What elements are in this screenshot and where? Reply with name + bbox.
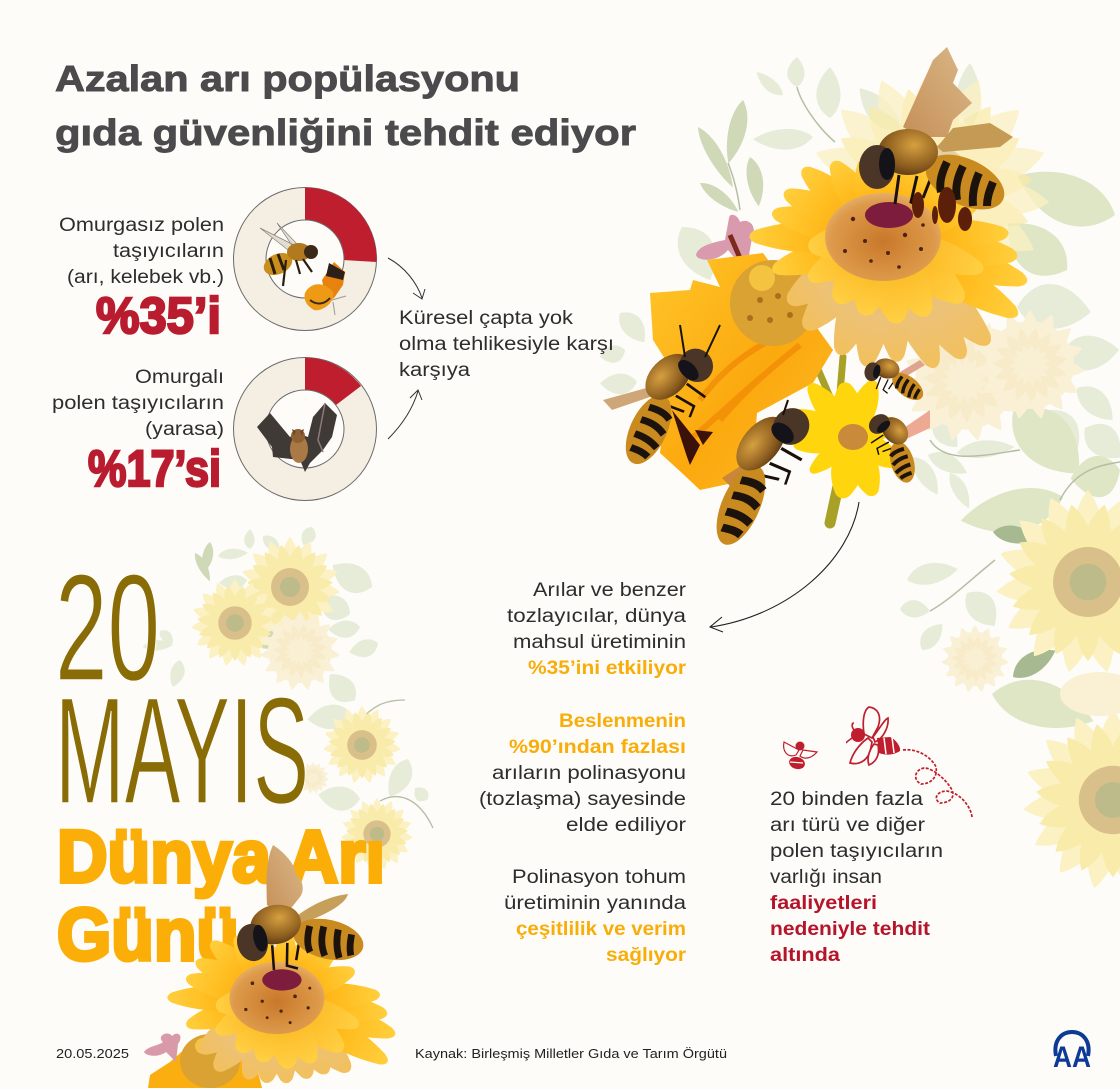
arrow: top donut to text bbox=[388, 258, 425, 299]
arrow: flower to text bbox=[710, 502, 859, 632]
small yellow flower bbox=[783, 376, 907, 501]
text: threatened species: polen taşıyıcıların bbox=[770, 841, 943, 862]
heading: 20 Mayıs: 20 bbox=[55, 543, 160, 713]
wings bbox=[267, 845, 303, 917]
text: pollination: sağlıyor bbox=[606, 945, 687, 966]
text: threatened species: faaliyetleri bbox=[770, 893, 877, 914]
title bbox=[55, 58, 636, 153]
text: global extinction threat: olma tehlikesiyle karşı bbox=[399, 334, 614, 355]
text: crop production: tozlayıcılar, dünya bbox=[507, 606, 686, 627]
title: gıda güvenliğini tehdit ediyor bbox=[55, 112, 636, 153]
logo: AA: AA bbox=[1053, 1041, 1091, 1074]
text: threatened species: altında bbox=[770, 945, 840, 966]
text: crop production: Arılar ve benzer bbox=[533, 580, 687, 601]
text: nutrition: (tozlaşma) sayesinde bbox=[479, 789, 686, 810]
figure: %35: %35’i bbox=[96, 287, 221, 344]
heading: Dünya Arı Günü: Dünya Arı bbox=[57, 815, 385, 898]
label: vertebrate pollinators bbox=[52, 367, 224, 440]
label: invertebrate pollinators bbox=[59, 215, 224, 288]
text: crop production: mahsul üretiminin bbox=[513, 632, 686, 653]
icon: red bees with dotted trail bbox=[784, 707, 972, 818]
icon: big bee bbox=[847, 707, 900, 765]
left bee bbox=[589, 325, 737, 481]
yellow flower bbox=[167, 929, 399, 1085]
date: 20.05.2025 bbox=[56, 1046, 129, 1061]
orange flower bbox=[650, 253, 833, 490]
orange flower, partly visible bbox=[148, 1034, 262, 1088]
heading: Dünya Arı Günü: Günü bbox=[57, 893, 239, 976]
donut chart: invertebrate pollinators bbox=[234, 187, 377, 330]
text: pollination: üretiminin yanında bbox=[504, 893, 686, 914]
icon: bee bbox=[260, 223, 318, 286]
stems bbox=[817, 357, 843, 523]
label: vertebrate pollinators: (yarasa) bbox=[145, 419, 224, 440]
text: pollination bbox=[504, 867, 687, 966]
icon: bat bbox=[257, 403, 337, 472]
main bee bbox=[859, 129, 1013, 231]
bee on yellow flower bbox=[853, 405, 938, 493]
title: Azalan arı popülasyonu bbox=[55, 58, 520, 99]
label: invertebrate pollinators: Omurgasız polen bbox=[59, 215, 224, 236]
text: crop production: %35’ini etkiliyor bbox=[528, 658, 687, 679]
text: pollination: çeşitlilik ve verim bbox=[516, 919, 686, 940]
text: threatened species: varlığı insan bbox=[770, 867, 882, 888]
text: nutrition: Beslenmenin bbox=[559, 711, 686, 732]
text: global extinction threat bbox=[399, 308, 614, 381]
label: invertebrate pollinators: taşıyıcıların bbox=[113, 241, 224, 262]
text: nutrition bbox=[479, 711, 687, 836]
text: threatened species: arı türü ve diğer bbox=[770, 815, 926, 836]
text: nutrition: arıların polinasyonu bbox=[492, 763, 686, 784]
text: global extinction threat: karşıya bbox=[399, 360, 470, 381]
text: pollination: Polinasyon tohum bbox=[512, 867, 686, 888]
donut chart: vertebrate pollinators bbox=[234, 358, 376, 500]
main bee wings bbox=[903, 47, 972, 137]
lower bee bbox=[676, 392, 836, 563]
yellow flower bbox=[749, 153, 1032, 375]
text: threatened species bbox=[770, 789, 943, 966]
heading: Dünya Arı Günü bbox=[57, 815, 385, 976]
text: nutrition: %90’ından fazlası bbox=[509, 737, 686, 758]
pale flowers lower left bbox=[143, 524, 433, 871]
dotted trail bbox=[903, 750, 972, 818]
text: threatened species: 20 binden fazla bbox=[770, 789, 924, 810]
arrow: bottom donut to text bbox=[388, 390, 422, 439]
label: invertebrate pollinators: (arı, kelebek vb.) bbox=[67, 267, 224, 288]
text: nutrition: elde ediliyor bbox=[566, 815, 687, 836]
figure: %17: %17’si bbox=[88, 440, 221, 497]
source: Kaynak: Birleşmiş Milletler Gıda ve Tarım Örgütü bbox=[415, 1046, 727, 1061]
bee bbox=[231, 887, 375, 990]
pale leaves and flowers right bbox=[598, 57, 1120, 893]
icon: small bee bbox=[784, 742, 817, 771]
text: global extinction threat: Küresel çapta yok bbox=[399, 308, 574, 329]
illustration: sunflower and bee, lower left bbox=[144, 845, 399, 1088]
text: crop production bbox=[507, 580, 687, 679]
pink bud bbox=[696, 215, 754, 272]
label: vertebrate pollinators: Omurgalı bbox=[135, 367, 224, 388]
icon: butterfly bbox=[304, 262, 346, 315]
heading: 20 Mayıs bbox=[55, 543, 309, 836]
label: vertebrate pollinators: polen taşıyıcıların bbox=[52, 393, 224, 414]
heading: 20 Mayıs: MAYIS bbox=[55, 666, 309, 836]
pink bud bbox=[144, 1034, 180, 1062]
illustration: flower and bee cluster, upper right bbox=[589, 47, 1032, 563]
text: threatened species: nedeniyle tehdit bbox=[770, 919, 931, 940]
small bee bbox=[860, 354, 933, 407]
